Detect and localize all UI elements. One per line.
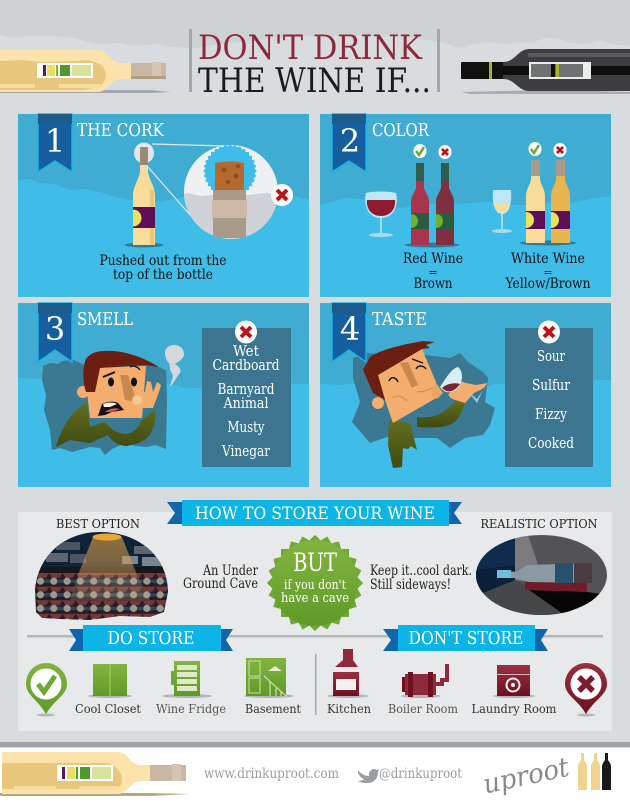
divider line bbox=[27, 635, 603, 638]
list: taste: Cooked bbox=[528, 436, 574, 452]
ribbon 4 bbox=[332, 303, 366, 362]
footer bottle bbox=[0, 752, 190, 796]
caption: red wine: Brown bbox=[414, 276, 452, 292]
ribbon: do store bbox=[69, 625, 233, 651]
icon: kitchen bbox=[327, 649, 369, 698]
caption: white wine bbox=[505, 251, 590, 292]
ribbon: don't store: DON'T STORE bbox=[408, 628, 524, 649]
ribbon 1: 1 bbox=[45, 122, 65, 160]
starburst: but: BUT bbox=[293, 548, 337, 577]
starburst: but: have a cave bbox=[281, 591, 349, 606]
icon: twitter bird bbox=[358, 769, 379, 783]
text: under ground cave bbox=[183, 563, 258, 592]
x badge bbox=[271, 184, 293, 206]
ribbon 4: 4 bbox=[340, 310, 360, 348]
ribbon heading: how to store: HOW TO STORE YOUR WINE bbox=[195, 504, 435, 524]
tiny bottles bbox=[578, 753, 611, 790]
bottle with cork pushed out bbox=[125, 142, 225, 248]
ribbon 3: 3 bbox=[45, 310, 65, 348]
brush patch bbox=[42, 360, 167, 455]
ribbon heading: how to store bbox=[167, 500, 462, 526]
closet illustration bbox=[476, 535, 608, 615]
cave illustration bbox=[35, 532, 168, 620]
white wine glass bbox=[492, 190, 512, 233]
list: smell: Barnyard bbox=[218, 382, 274, 398]
odor wisp bbox=[165, 345, 184, 387]
icon: wine fridge bbox=[162, 661, 212, 698]
caption: cork: top of the bottle bbox=[113, 267, 213, 283]
man smelling bbox=[56, 351, 161, 447]
label: basement: Basement bbox=[245, 701, 301, 716]
text: keep it cool: Keep it..cool dark. bbox=[370, 563, 472, 579]
icon: laundry room bbox=[493, 665, 535, 698]
check and x badges: red bbox=[414, 144, 452, 159]
caption: white wine: = bbox=[543, 266, 553, 279]
list: taste: Fizzy bbox=[535, 407, 568, 423]
pin: x bbox=[565, 663, 607, 716]
heading: smell: SMELL bbox=[77, 309, 133, 330]
panel 4: taste bbox=[320, 303, 611, 487]
ribbon 1 bbox=[38, 114, 72, 172]
ribbon: don't store bbox=[383, 625, 548, 651]
text: keep it cool bbox=[370, 563, 472, 593]
list: taste: Sour bbox=[537, 349, 565, 365]
list: smell: Musty bbox=[228, 420, 265, 436]
panel 3: smell bbox=[18, 303, 309, 487]
list: taste bbox=[505, 320, 593, 467]
heading: taste: TASTE bbox=[372, 309, 427, 330]
brush patch bbox=[352, 353, 495, 448]
heading: color: COLOR bbox=[372, 120, 429, 141]
ribbon 3 bbox=[38, 303, 72, 362]
icon: cool closet bbox=[88, 664, 132, 698]
list: smell: Cardboard bbox=[212, 358, 280, 374]
label: cool closet: Cool Closet bbox=[75, 701, 141, 716]
man tasting bbox=[363, 341, 487, 468]
website: www.drinkuproot.com bbox=[204, 766, 339, 782]
footer band bbox=[0, 742, 630, 748]
title: THE WINE IF... bbox=[198, 61, 431, 101]
caption: red wine: Red Wine bbox=[403, 251, 463, 267]
caption: white wine: Yellow/Brown bbox=[505, 276, 590, 292]
ribbon 2 bbox=[332, 114, 366, 172]
magnified cork bbox=[184, 144, 278, 239]
label: realistic option: REALISTIC OPTION bbox=[480, 516, 598, 531]
heading: the cork: THE CORK bbox=[77, 120, 164, 141]
label: best option: BEST OPTION bbox=[56, 516, 140, 531]
list: smell: Vinegar bbox=[221, 444, 270, 460]
starburst: but bbox=[267, 535, 363, 631]
uproot logo: uproot bbox=[480, 752, 572, 800]
label: kitchen: Kitchen bbox=[327, 701, 371, 716]
icon: basement bbox=[244, 658, 294, 698]
caption: white wine: White Wine bbox=[511, 251, 585, 267]
caption: cork: Pushed out from the bbox=[100, 253, 226, 269]
panel: how to store bbox=[18, 500, 612, 731]
ribbon 2: 2 bbox=[340, 122, 360, 160]
caption: red wine bbox=[403, 251, 463, 292]
vertical divider bbox=[315, 654, 316, 715]
text: keep it cool: Still sideways! bbox=[370, 577, 451, 593]
title: DON'T DRINK bbox=[198, 28, 423, 68]
label: laundry room: Laundry Room bbox=[472, 701, 557, 716]
caption: cork bbox=[100, 253, 226, 283]
title bbox=[189, 28, 440, 101]
header texture band bbox=[0, 0, 630, 48]
list: smell: Wet bbox=[233, 344, 259, 360]
panel 1: the cork bbox=[18, 114, 309, 297]
list: smell: Animal bbox=[223, 396, 269, 412]
icon: boiler room bbox=[401, 664, 447, 698]
label: wine fridge: Wine Fridge bbox=[156, 701, 226, 716]
text: under ground cave: Ground Cave bbox=[183, 576, 258, 592]
bottle: red wine header bbox=[461, 49, 630, 94]
white wine bottles bbox=[520, 160, 576, 246]
text: under ground cave: An Under bbox=[202, 563, 258, 579]
pin: check bbox=[26, 663, 67, 716]
caption: red wine: = bbox=[428, 266, 438, 279]
red wine glass bbox=[365, 192, 397, 237]
red wine bottles bbox=[405, 163, 459, 248]
list: smell bbox=[202, 320, 291, 467]
check and x badges: white bbox=[528, 142, 566, 157]
label: boiler room: Boiler Room bbox=[388, 701, 458, 716]
bottle: white wine header bbox=[0, 50, 171, 93]
ribbon: do store: DO STORE bbox=[108, 628, 194, 649]
list: taste: Sulfur bbox=[532, 378, 570, 394]
starburst: but: if you don't bbox=[284, 578, 347, 593]
twitter handle: @drinkuproot bbox=[379, 766, 462, 782]
panel 2: color bbox=[320, 114, 611, 297]
